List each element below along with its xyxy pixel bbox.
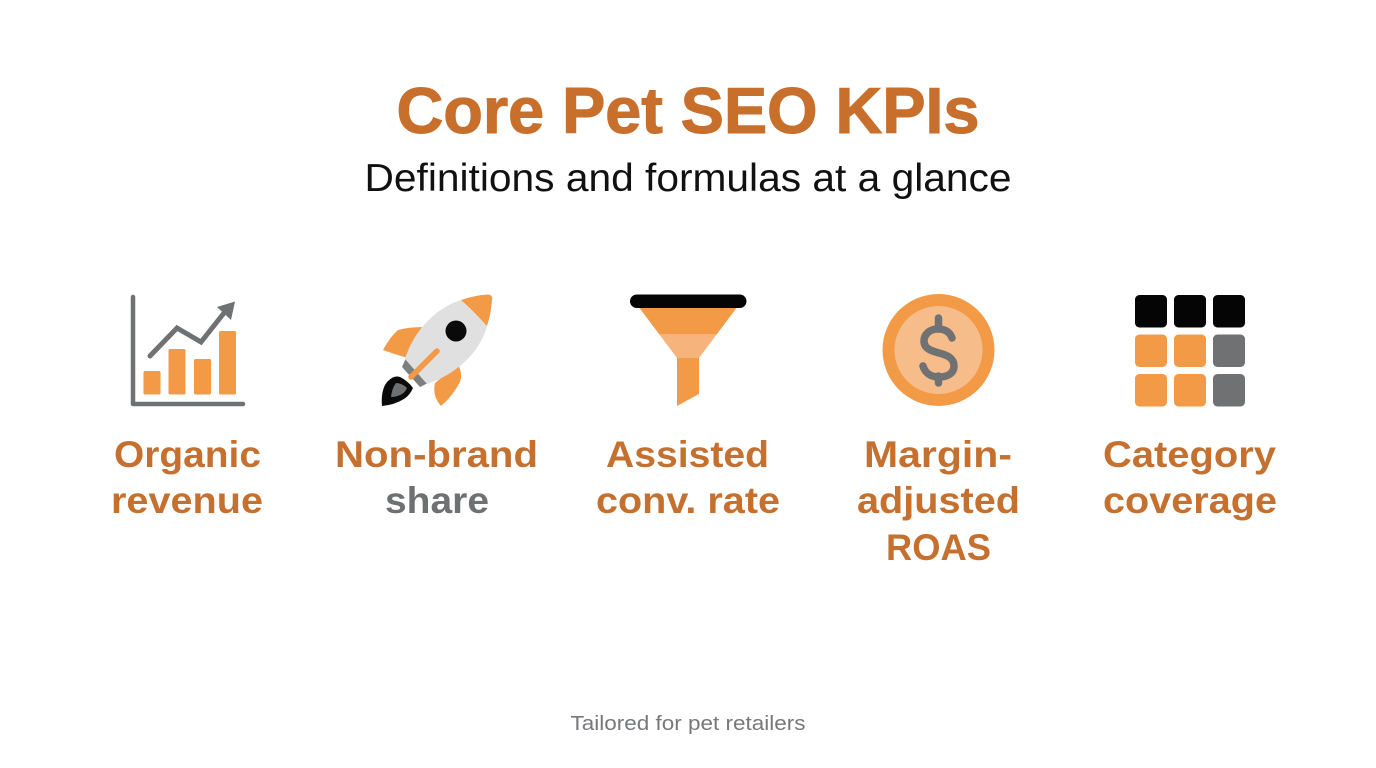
label: margin-adjusted ROAS: Margin- bbox=[864, 434, 1012, 475]
icon: funnel bbox=[630, 294, 746, 406]
label: category coverage: coverage bbox=[1103, 480, 1277, 521]
label: assisted conversion rate: Assisted bbox=[606, 434, 769, 475]
panel: margin-adjusted ROAS bbox=[857, 294, 1020, 568]
label: non-brand share bbox=[335, 434, 538, 521]
icon: dollar coin bbox=[882, 294, 994, 406]
panel: non-brand share bbox=[335, 294, 538, 521]
icon: growth chart bbox=[133, 297, 243, 404]
panel: organic revenue bbox=[111, 297, 263, 521]
label: margin-adjusted ROAS: ROAS bbox=[886, 527, 991, 568]
label: margin-adjusted ROAS: adjusted bbox=[857, 480, 1020, 521]
label: margin-adjusted ROAS bbox=[857, 434, 1020, 568]
title: Core Pet SEO KPIs bbox=[396, 74, 980, 147]
label: assisted conversion rate bbox=[596, 434, 780, 521]
label: organic revenue: Organic bbox=[114, 434, 261, 475]
panel: assisted conversion rate bbox=[596, 294, 780, 521]
icon: rocket bbox=[382, 294, 492, 406]
label: organic revenue: revenue bbox=[111, 480, 263, 521]
label: non-brand share: Non-brand bbox=[335, 434, 538, 475]
label: assisted conversion rate: conv. rate bbox=[596, 480, 780, 521]
label: organic revenue bbox=[111, 434, 263, 521]
icon: coverage grid bbox=[1135, 295, 1245, 406]
label: category coverage bbox=[1103, 434, 1277, 521]
panel: category coverage bbox=[1103, 295, 1277, 521]
label: non-brand share: share bbox=[385, 480, 489, 521]
footer note: Tailored for pet retailers bbox=[570, 713, 806, 735]
label: category coverage: Category bbox=[1103, 434, 1276, 475]
subtitle: Definitions and formulas at a glance bbox=[364, 157, 1012, 200]
